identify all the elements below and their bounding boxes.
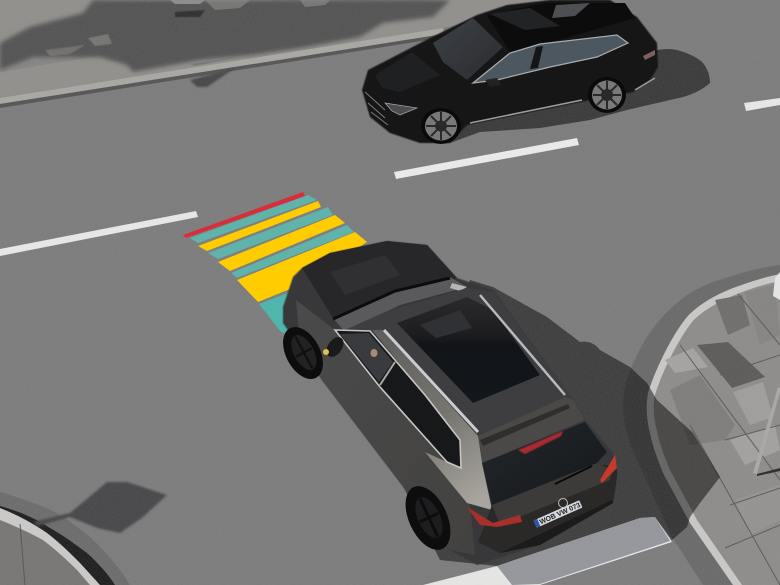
front car rear wheel (396, 479, 460, 557)
front car side windows (335, 330, 461, 468)
front car panoramic roof (397, 297, 540, 403)
yellow band 1 (198, 201, 321, 251)
licence plate: WOB VW 073 (539, 502, 582, 526)
right tail light (600, 455, 617, 483)
paving (654, 281, 780, 585)
front car roof (345, 288, 573, 436)
shadow on the far curb (190, 68, 235, 87)
far car rear trim (635, 78, 655, 90)
far car sill trim (470, 100, 582, 123)
yellow band 3 (237, 232, 367, 302)
lane marking: centre dash (394, 138, 579, 179)
far car front wheel (421, 108, 461, 144)
bottom-left sidewalk and curb (0, 492, 130, 585)
far car: black estate (362, 0, 658, 144)
lane marking: right dash (744, 98, 780, 111)
lane marking: left dash (0, 211, 198, 256)
top-left sidewalk (0, 0, 560, 108)
front car shoulder highlight (372, 330, 492, 510)
far car headlight (385, 103, 417, 115)
shadow: far car (440, 49, 710, 143)
far car body (362, 0, 658, 143)
tailgate (478, 465, 617, 553)
mirror indicator (323, 349, 329, 355)
VW badge (558, 498, 568, 508)
teal band 4 (259, 292, 290, 335)
front car front wheel (275, 320, 331, 386)
front car rear window (482, 422, 607, 505)
bottom-right sidewalk and curb (623, 265, 780, 585)
stop line (423, 517, 672, 585)
assist graphic: coloured warning zones (183, 192, 367, 335)
far car grille (365, 92, 388, 125)
front car body (283, 241, 617, 565)
far car hood reflection (375, 52, 440, 92)
sign shadow on the road (33, 482, 167, 533)
shadow: front car (400, 280, 720, 566)
driver's hand (370, 349, 378, 357)
front car cowl (333, 277, 467, 332)
shadowed part of stop line (497, 517, 670, 585)
yellow band 2 (218, 215, 345, 271)
teal band 3 (231, 225, 354, 278)
teal band 2 (208, 207, 333, 259)
far car windshield (433, 18, 503, 80)
red limit line (183, 192, 305, 238)
teal band 1 (190, 195, 317, 243)
far car rear wheel (588, 77, 626, 113)
signpost (753, 272, 780, 476)
high-mounted brake light (518, 431, 563, 454)
curb apron (623, 265, 780, 585)
white curb (647, 274, 780, 585)
front car side panel (296, 300, 475, 555)
far car roof glass (487, 3, 635, 52)
far car side windows (473, 35, 628, 83)
rear wiper (555, 466, 592, 484)
front car hood (302, 241, 457, 318)
front car roof rails (384, 330, 478, 432)
front car: grey SUV (275, 241, 617, 565)
front car mirror (323, 334, 347, 360)
far car mirror (485, 78, 501, 87)
front car rear roof (470, 397, 585, 463)
far car tail light (643, 50, 655, 60)
left tail light (467, 507, 522, 527)
